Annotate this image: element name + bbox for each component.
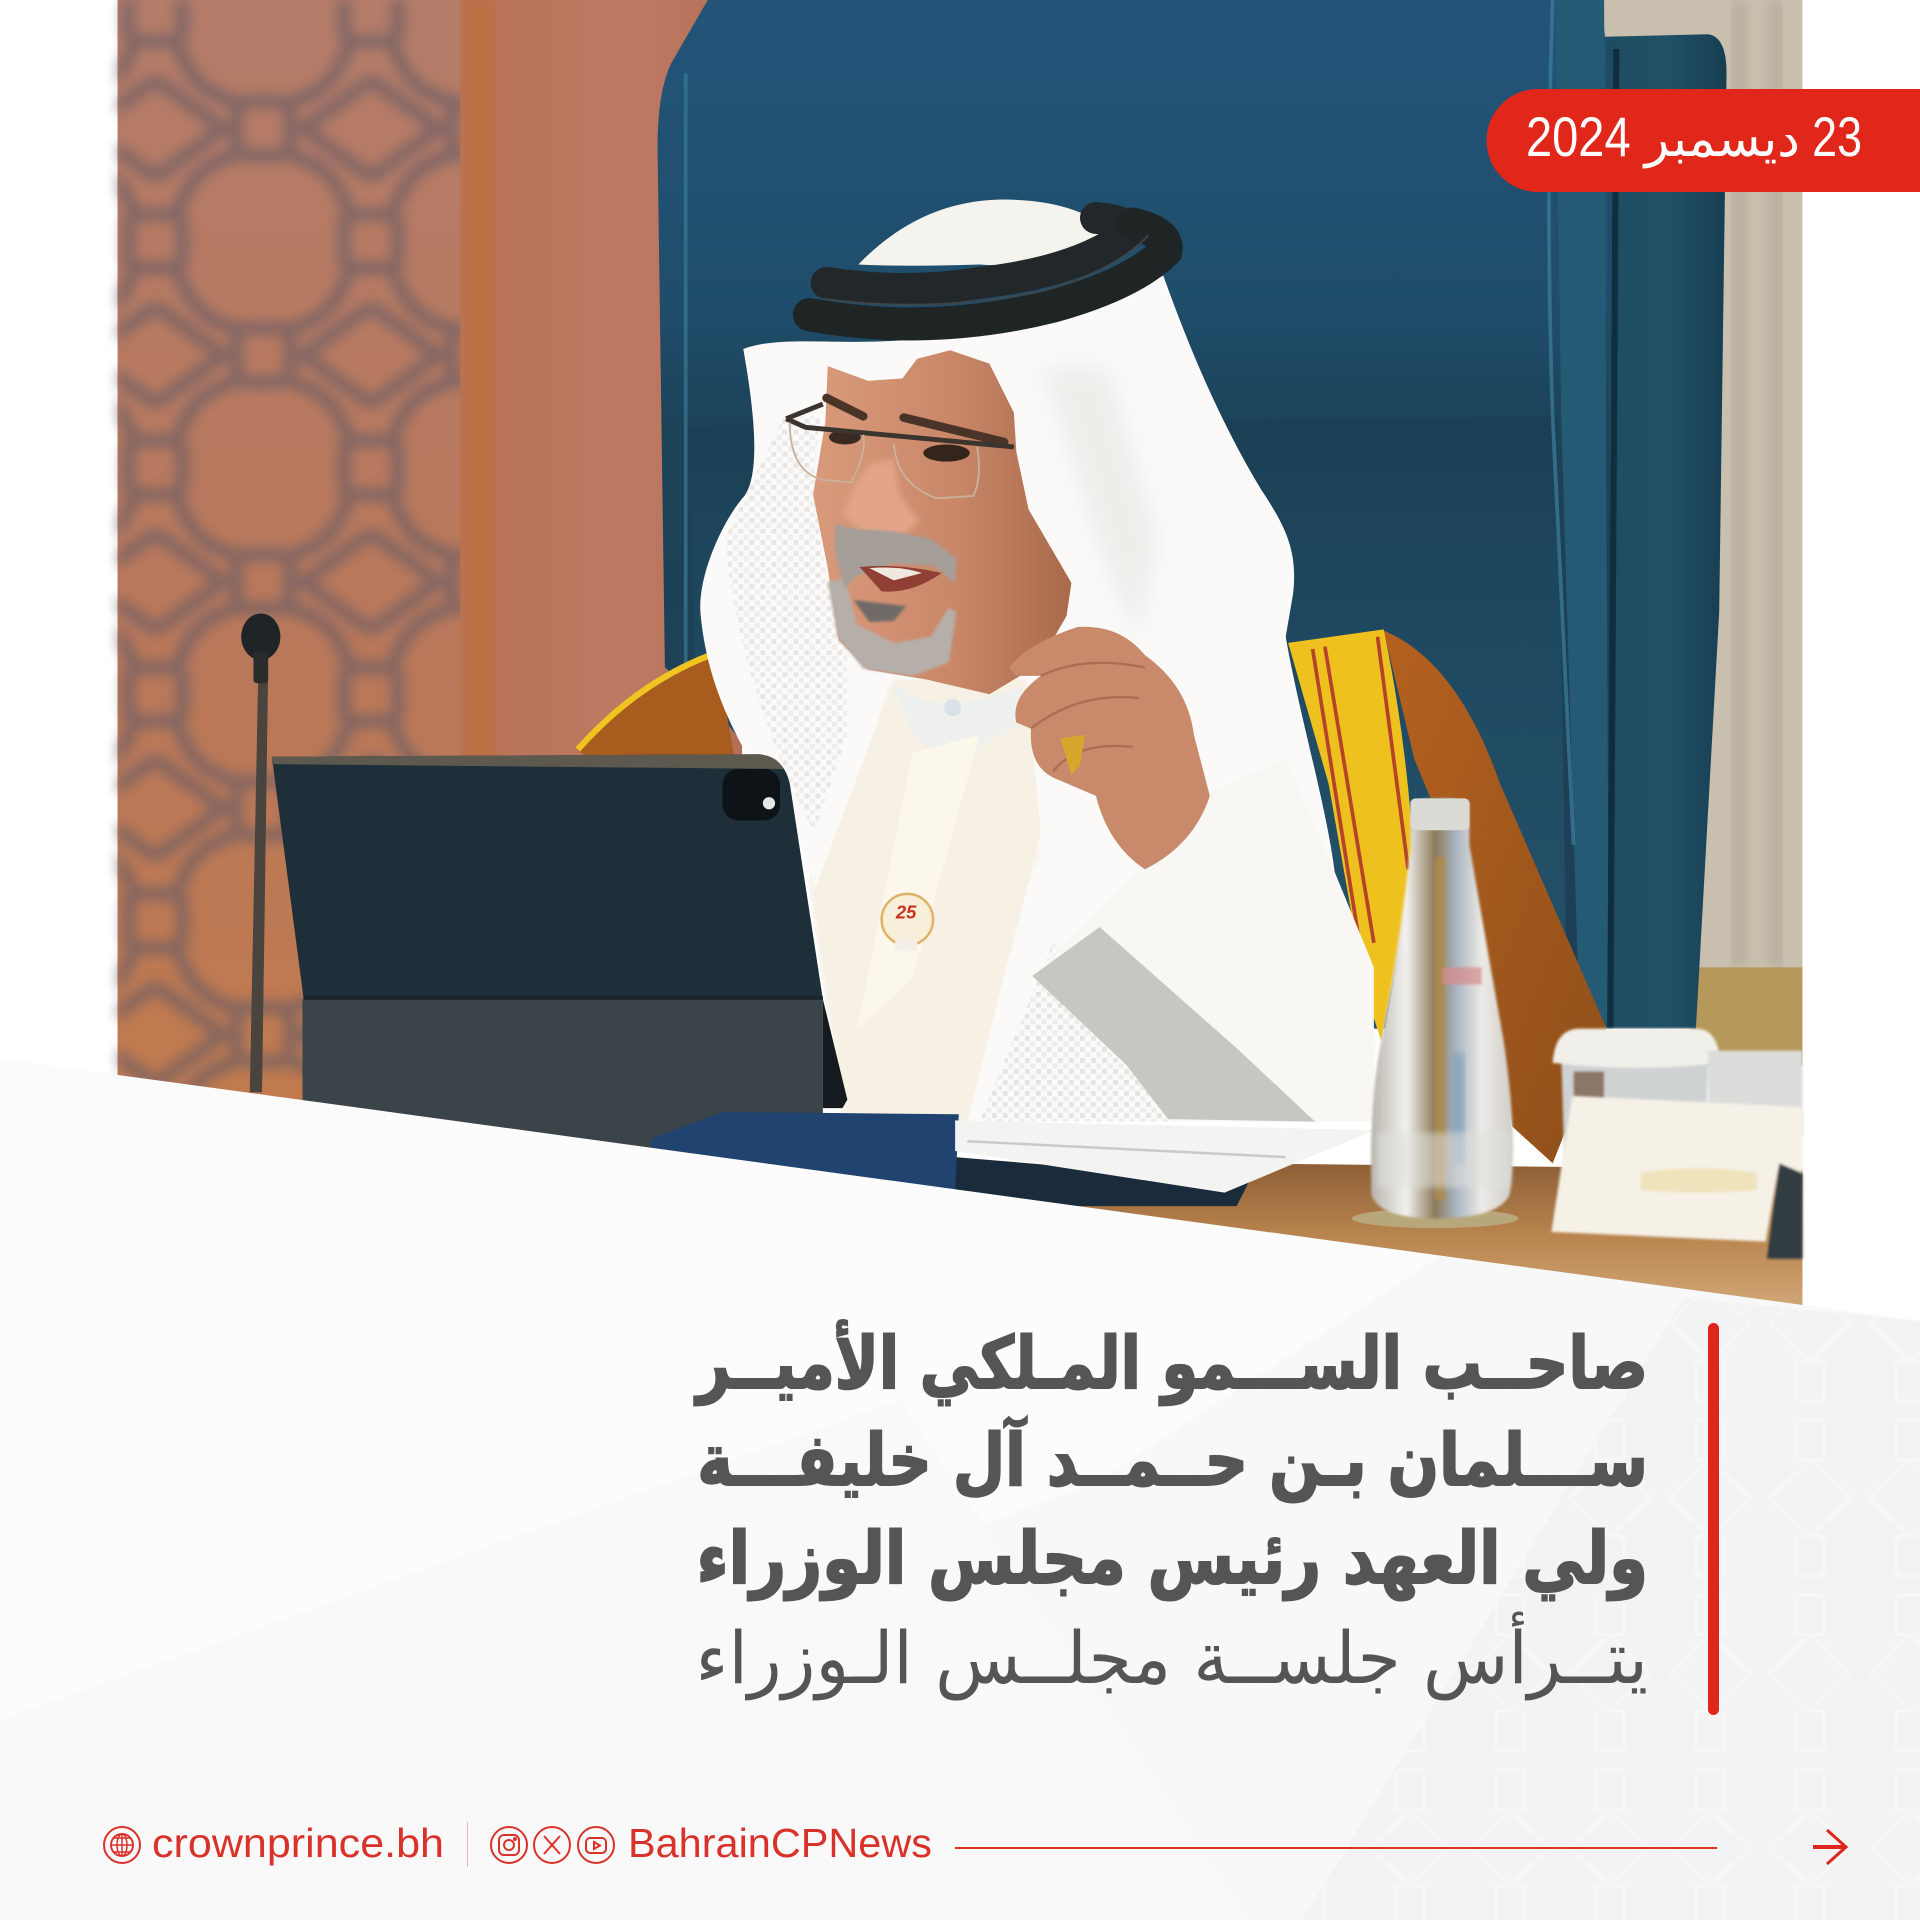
glasses [786,404,1014,498]
table surface [955,1163,1802,1310]
background: patterned wall and curtain [118,0,1802,1102]
footer: website [104,1820,444,1866]
footer: social media [491,1820,932,1866]
white angled background panel [0,1059,1920,1920]
white place card [1551,1096,1802,1259]
white thobe and sleeve [813,680,1374,1122]
arrow [1813,1830,1846,1864]
heading line 3: ولي العهد رئيس مجلس الوزراء [697,1516,1648,1601]
mouth [860,566,942,592]
blue box [651,1112,959,1194]
headline text [694,1319,1648,1701]
social handle: BahrainCPNews [628,1820,932,1866]
raised hand with gold ring [1009,627,1210,869]
date badge [1486,89,1920,192]
white garment underlay [808,661,1378,1122]
photo: crown prince at cabinet meeting [118,0,1802,1310]
white papers [955,1120,1374,1193]
website address: crownprince.bh [152,1820,444,1866]
footer divider [467,1822,468,1867]
icon: X [534,1827,570,1863]
brown bisht cloak with gold trim [578,629,1607,1163]
heading line 4: يتــرأس جلســة مجلــس الـوزراء [696,1611,1648,1701]
glass with white lid [1553,1029,1802,1176]
lapel pin 25: 25 [895,901,917,922]
heading line 1: صاحــب الســـمو المـلكي الأميــر [694,1319,1648,1407]
red accent bar [1708,1323,1719,1715]
eyes and brows [827,398,1004,442]
dark folder under papers [955,1157,1249,1206]
footer rule [955,1847,1717,1849]
nose [844,459,918,536]
face [786,350,1071,694]
white ghutra headdress [700,276,1378,1122]
tablet with keyboard case [272,754,847,1157]
beard [828,578,956,676]
year: 2024 [1526,105,1631,168]
icon: instagram [491,1827,527,1863]
black agal headband and white cap [809,200,1166,324]
office chair [658,0,1727,1029]
lapel pin 25 [882,894,933,951]
month name: ديسمبر [1642,110,1800,169]
day number: 23 [1812,105,1862,168]
icon: globe [104,1827,140,1863]
heading line 2: ســـلمان بـن حــمــد آل خليفـــة [697,1416,1648,1503]
icon: youtube [578,1827,614,1863]
glass water bottle [1352,798,1518,1228]
microphone [241,613,280,1092]
moustache [835,524,956,588]
